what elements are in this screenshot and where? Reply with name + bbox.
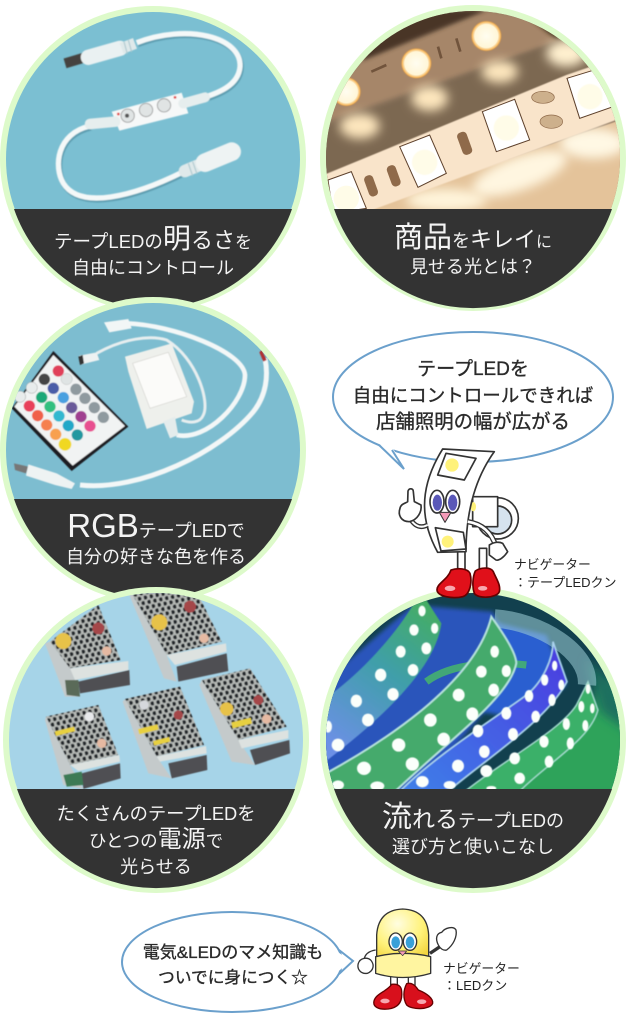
heading: flowing: 流れるテープLEDの	[382, 801, 564, 834]
subheading: brightness: 自由にコントロール	[72, 258, 234, 278]
heading: products: 商品をキレイに	[394, 221, 552, 254]
caption bar	[14, 209, 292, 308]
caption bar	[334, 789, 612, 888]
panel: store lighting	[320, 5, 626, 311]
heading: RGB: RGBテープLEDで	[67, 507, 245, 544]
label: tape LED navigator: ナビゲーター	[514, 557, 591, 572]
subheading: products: 見せる光とは？	[410, 257, 536, 277]
photo: power supply units	[45, 592, 290, 789]
label: LED navigator: ナビゲーター	[443, 961, 520, 976]
strip band: green	[323, 617, 516, 798]
callout: tape LED speech bubble: 店舗照明の幅が広がる	[376, 411, 570, 433]
caption bar	[334, 209, 612, 308]
panel: brightness controller	[0, 6, 306, 312]
icon: LED mascot	[358, 909, 456, 1009]
subheading: RGB: 自分の好きな色を作る	[66, 547, 246, 567]
icon: tape LED mascot	[399, 449, 518, 598]
label: LED navigator	[443, 961, 520, 993]
heading: brightness: テープLEDの明るさを	[54, 223, 252, 254]
photo: dimmer cable	[58, 34, 241, 200]
LEDs	[324, 606, 595, 791]
caption bar	[14, 499, 292, 598]
strip band: blue	[393, 642, 567, 798]
heading: power line 2: ひとつの電源で	[89, 826, 223, 853]
panel: RGB controller	[0, 297, 306, 603]
photo: warm led strip	[320, 10, 626, 213]
label: tape LED navigator	[514, 557, 617, 590]
label: tape LED navigator: ：テープLEDクン	[514, 575, 617, 590]
panel: flowing LED	[320, 587, 626, 893]
strip band: right green	[466, 680, 600, 789]
caption bar	[17, 789, 295, 888]
callout: tape LED speech bubble	[333, 332, 613, 469]
callout: trivia speech bubble	[122, 912, 353, 1012]
callout: trivia speech bubble: ついでに身につく☆	[158, 968, 308, 987]
heading: power line 3: 光らせる	[120, 857, 192, 877]
callout: tape LED speech bubble: 自由にコントロールできれば	[353, 385, 593, 406]
photo: remote and controller	[12, 319, 267, 489]
subheading: flowing: 選び方と使いこなし	[392, 837, 554, 857]
panel: power supplies	[3, 587, 309, 893]
callout: tape LED speech bubble: テープLEDを	[417, 358, 529, 380]
callout: trivia speech bubble: 電気&LEDのマメ知識も	[143, 943, 323, 962]
heading: power line 1: たくさんのテープLEDを	[56, 803, 256, 824]
strip band: left	[320, 600, 441, 763]
label: LED navigator: ：LEDクン	[443, 978, 507, 993]
photo: flowing rgb strip	[320, 600, 626, 798]
